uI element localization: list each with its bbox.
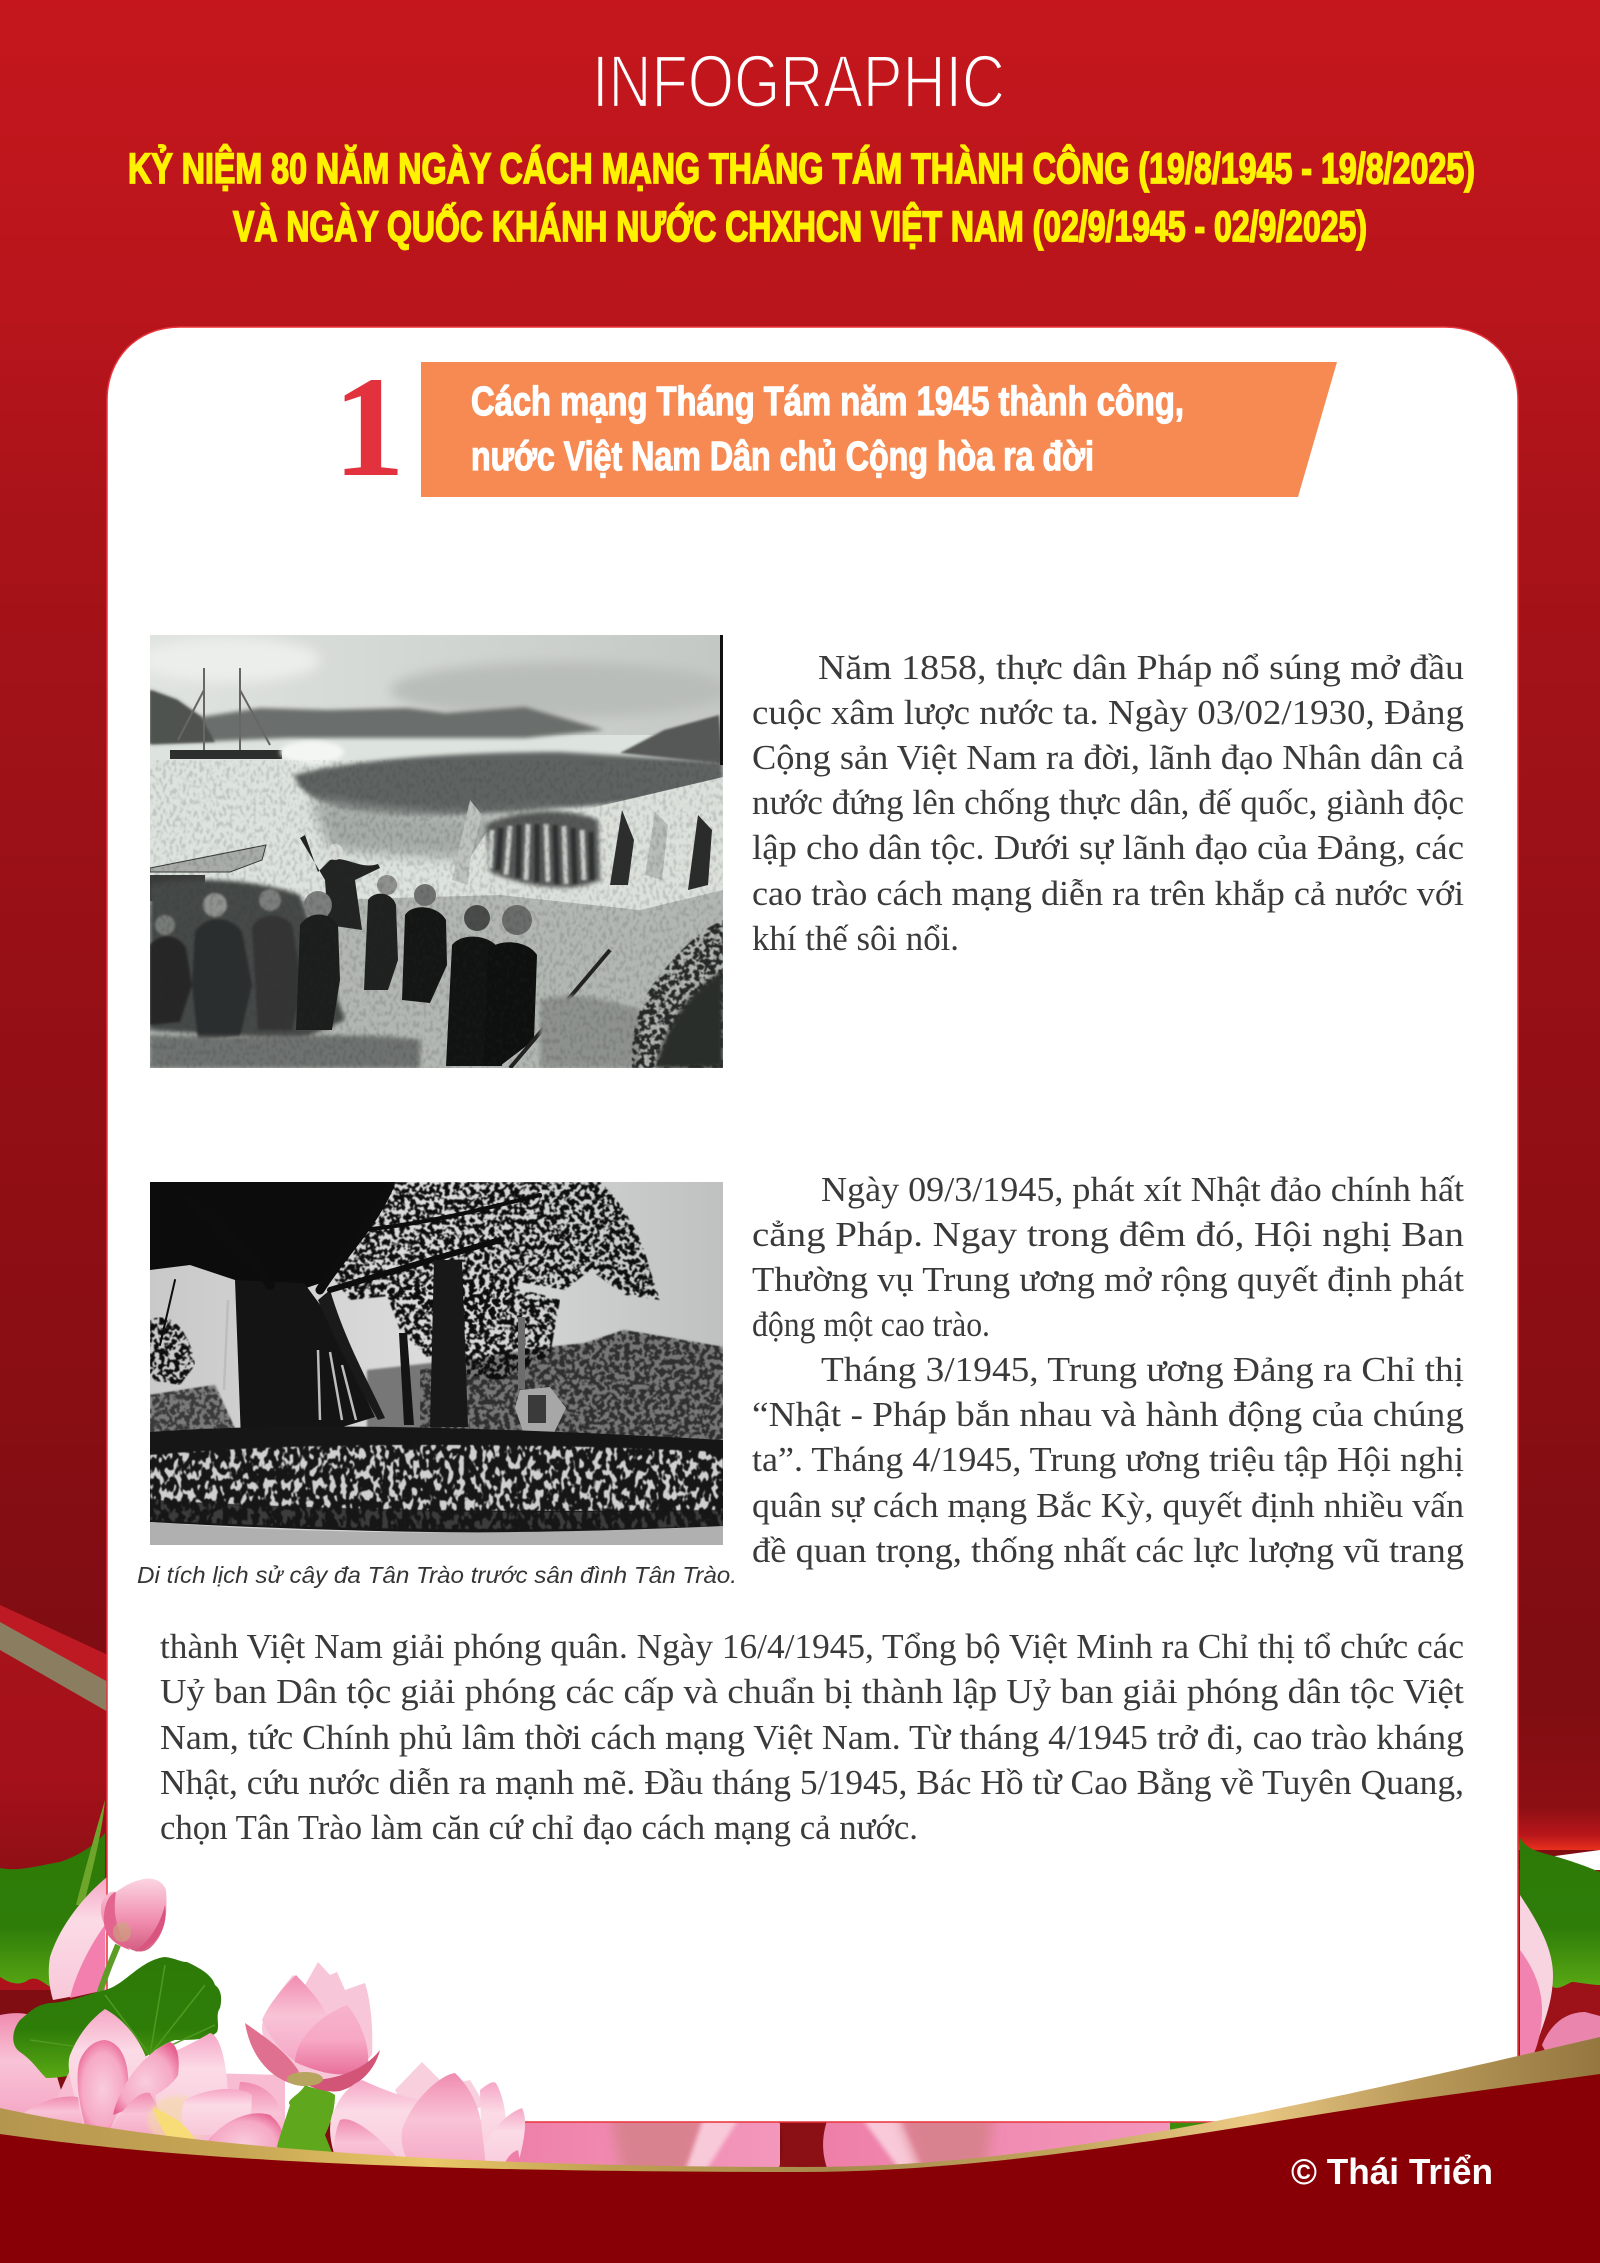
text block: paragraph 3: Nam, tức Chính phủ lâm thời cách mạng Việt Nam. Từ tháng 4/1945 trở đi, cao trào kháng <box>160 1718 1464 1757</box>
text block: paragraph 1: cuộc xâm lược nước ta. Ngày 03/02/1930, Đảng <box>752 693 1464 732</box>
footer band <box>0 2074 1600 2263</box>
panel: white card <box>107 327 1518 2122</box>
text block: paragraph 2: quân sự cách mạng Bắc Kỳ, quyết định nhiều vấn <box>752 1486 1464 1525</box>
section number: 1 <box>333 348 405 507</box>
text block: paragraph 1: cao trào cách mạng diễn ra trên khắp cả nước với <box>752 874 1464 913</box>
text block: paragraph 3: Uỷ ban Dân tộc giải phóng các cấp và chuẩn bị thành lập Uỷ ban giải phóng dân tộc Việt <box>160 1672 1464 1711</box>
left ribbon swoosh <box>0 1605 108 1990</box>
text block: paragraph 2: Ngày 09/3/1945, phát xít Nhật đảo chính hất <box>821 1170 1464 1209</box>
photo caption: Di tích lịch sử cây đa Tân Trào trước sân đình Tân Trào. <box>137 1562 737 1588</box>
text block: paragraph 2: đề quan trọng, thống nhất các lực lượng vũ trang <box>752 1531 1464 1570</box>
text block: paragraph 2: động một cao trào. <box>752 1305 990 1344</box>
text block: paragraph 2: “Nhật - Pháp bắn nhau và hành động của chúng <box>752 1395 1464 1434</box>
subtitle <box>128 144 1475 251</box>
text block: paragraph 2: Tháng 3/1945, Trung ương Đảng ra Chỉ thị <box>821 1350 1464 1389</box>
copyright: © Thái Triển <box>1291 2151 1493 2192</box>
icon: right lotus flower <box>330 2062 525 2175</box>
title: INFOGRAPHIC <box>592 40 1005 123</box>
text block: paragraph 2 <box>752 1170 1464 1570</box>
photo: historical engraving of landing soldiers <box>140 635 730 1068</box>
section heading banner: nước Việt Nam Dân chủ Cộng hòa ra đời <box>471 433 1094 479</box>
text block: paragraph 3: thành Việt Nam giải phóng quân. Ngày 16/4/1945, Tổng bộ Việt Minh ra Chỉ thị tổ chức các <box>160 1627 1464 1666</box>
text block: paragraph 1 <box>752 648 1464 958</box>
text block: paragraph 2: Thường vụ Trung ương mở rộng quyết định phát <box>752 1260 1464 1299</box>
icon: small green leaf <box>277 2085 335 2160</box>
icon: open lotus flower <box>20 2009 285 2168</box>
text block: paragraph 2: cẳng Pháp. Ngay trong đêm đó, Hội nghị Ban <box>752 1215 1464 1254</box>
icon: lotus leaf and left petal <box>0 1957 221 2120</box>
text block: paragraph 1: nước đứng lên chống thực dân, đế quốc, giành độc <box>752 783 1464 822</box>
icon: lotus bud on stem <box>88 1878 167 2030</box>
text block: paragraph 3: Nhật, cứu nước diễn ra mạnh mẽ. Đầu tháng 5/1945, Bác Hồ từ Cao Bằng về Tuyên Quang, <box>160 1763 1464 1802</box>
text block: paragraph 3 <box>160 1627 1464 1847</box>
right glow streak <box>1518 1700 1600 2080</box>
section heading banner <box>421 362 1337 497</box>
right back leaf and petal <box>1520 1838 1600 2062</box>
text block: paragraph 1: lập cho dân tộc. Dưới sự lãnh đạo của Đảng, các <box>752 828 1464 867</box>
text block: paragraph 1: khí thế sôi nổi. <box>752 919 959 958</box>
text block: paragraph 3: chọn Tân Trào làm căn cứ chỉ đạo cách mạng cả nước. <box>160 1808 918 1847</box>
left back leaf and petal <box>0 1800 107 2000</box>
text block: paragraph 1: Cộng sản Việt Nam ra đời, lãnh đạo Nhân dân cả <box>752 738 1464 777</box>
text block: paragraph 2: ta”. Tháng 4/1945, Trung ương triệu tập Hội nghị <box>752 1440 1464 1479</box>
section heading banner: Cách mạng Tháng Tám năm 1945 thành công, <box>471 378 1184 424</box>
lotus band behind card <box>500 2115 1220 2188</box>
icon: lotus bud large <box>245 1962 380 2091</box>
text block: paragraph 1: Năm 1858, thực dân Pháp nổ súng mở đầu <box>818 648 1464 687</box>
photo: Tan Trao banyan tree with crowd <box>150 1182 723 1545</box>
gold swoosh <box>0 2037 1600 2263</box>
